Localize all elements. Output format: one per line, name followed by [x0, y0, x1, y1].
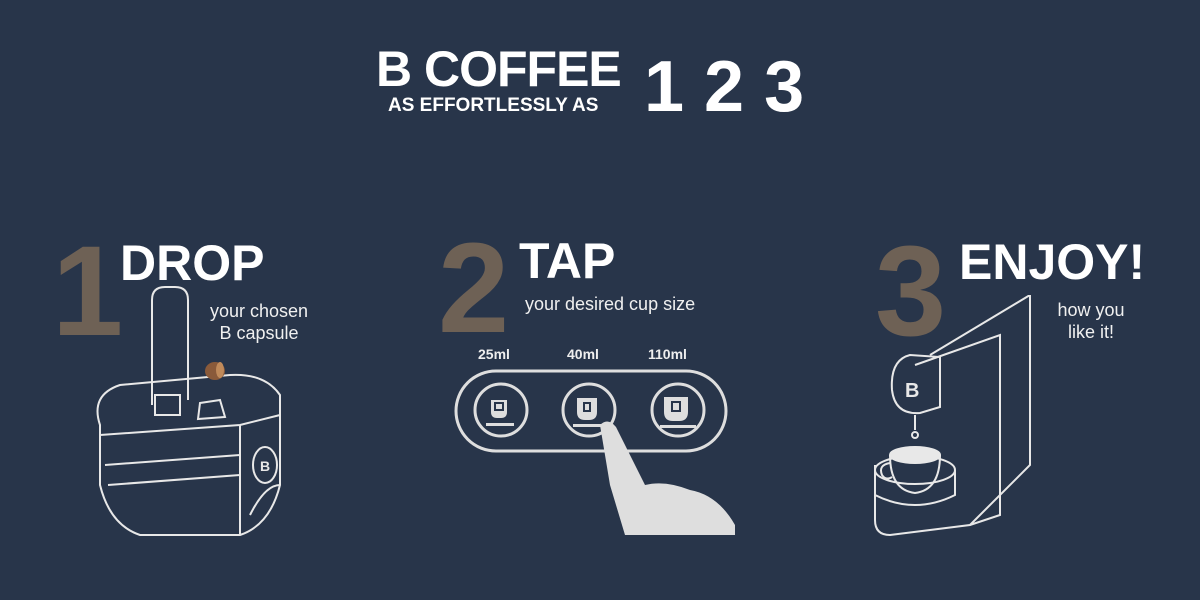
panel: step 1 drop	[52, 220, 308, 536]
text: your chosen B capsule: B capsule	[219, 323, 299, 343]
heading TAP: TAP	[519, 233, 615, 289]
icon: coffee machine with cup: B	[905, 380, 919, 402]
icon: coffee machine with cup	[874, 295, 1031, 536]
text: your desired cup size: your desired cup size	[525, 294, 695, 314]
labels: cup sizes: 110ml	[648, 346, 687, 362]
title: 1 2 3: 1 2 3	[644, 47, 804, 127]
icon: button panel with hand	[454, 370, 735, 535]
icon: capsule machine	[96, 286, 281, 536]
text: how you like it!: how you	[1057, 300, 1125, 320]
text: your chosen B capsule: your chosen	[210, 301, 308, 321]
icon: capsule	[205, 362, 225, 380]
heading DROP: DROP	[120, 235, 264, 291]
labels: cup sizes	[478, 346, 687, 362]
text: your chosen B capsule	[210, 301, 308, 343]
title: subtitle: AS EFFORTLESSLY AS	[388, 95, 598, 116]
title: B COFFEE: B COFFEE	[376, 41, 621, 97]
panel: step 2 tap	[438, 217, 735, 535]
title	[376, 41, 804, 127]
labels: cup sizes: 40ml	[567, 346, 599, 362]
icon: capsule machine: B	[260, 458, 270, 474]
step number 2: 2	[438, 217, 509, 360]
step number 1: 1	[52, 220, 123, 363]
panel: step 3 enjoy	[874, 220, 1145, 536]
step number 3: 3	[875, 220, 946, 363]
text: how you like it!: like it!	[1068, 322, 1114, 342]
heading ENJOY!: ENJOY!	[959, 234, 1145, 290]
labels: cup sizes: 25ml	[478, 346, 510, 362]
text: how you like it!	[1057, 300, 1125, 342]
